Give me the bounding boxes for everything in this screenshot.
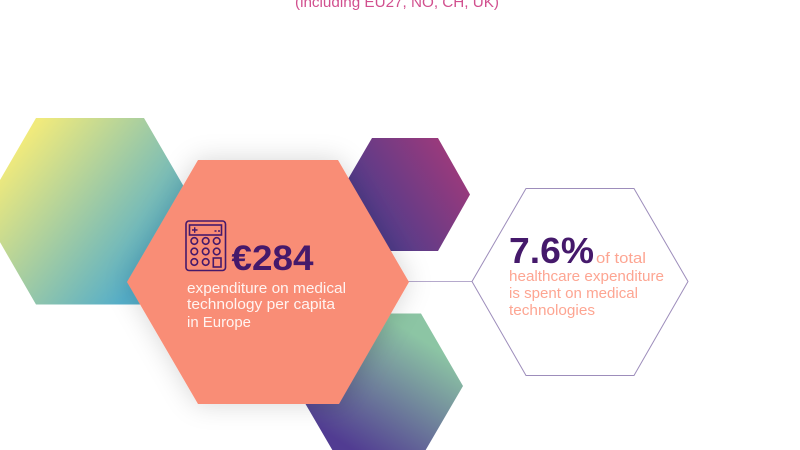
icon: calculator xyxy=(186,221,226,270)
panel: outlined hexagon xyxy=(472,188,688,376)
connector line xyxy=(405,280,472,282)
stat: €284: €284 xyxy=(232,239,314,278)
text: healthcare description: is spent on medical xyxy=(509,285,638,302)
text: healthcare description: of total xyxy=(596,250,646,267)
text: healthcare description xyxy=(509,250,664,319)
text: expenditure description: in Europe xyxy=(187,314,251,331)
text: healthcare description: technologies xyxy=(509,302,595,319)
text: expenditure description xyxy=(187,280,346,331)
stat: 7.6%: 7.6% xyxy=(509,230,594,271)
hexagon: purple gradient xyxy=(339,138,470,251)
panel: coral hexagon xyxy=(127,160,409,404)
hexagon: green-purple gradient xyxy=(295,314,463,450)
text: healthcare description: healthcare expenditure xyxy=(509,268,664,285)
text: expenditure description: expenditure on medical xyxy=(187,280,346,297)
text: expenditure description: technology per capita xyxy=(187,296,336,313)
hexagon: yellow-blue gradient xyxy=(0,118,198,304)
